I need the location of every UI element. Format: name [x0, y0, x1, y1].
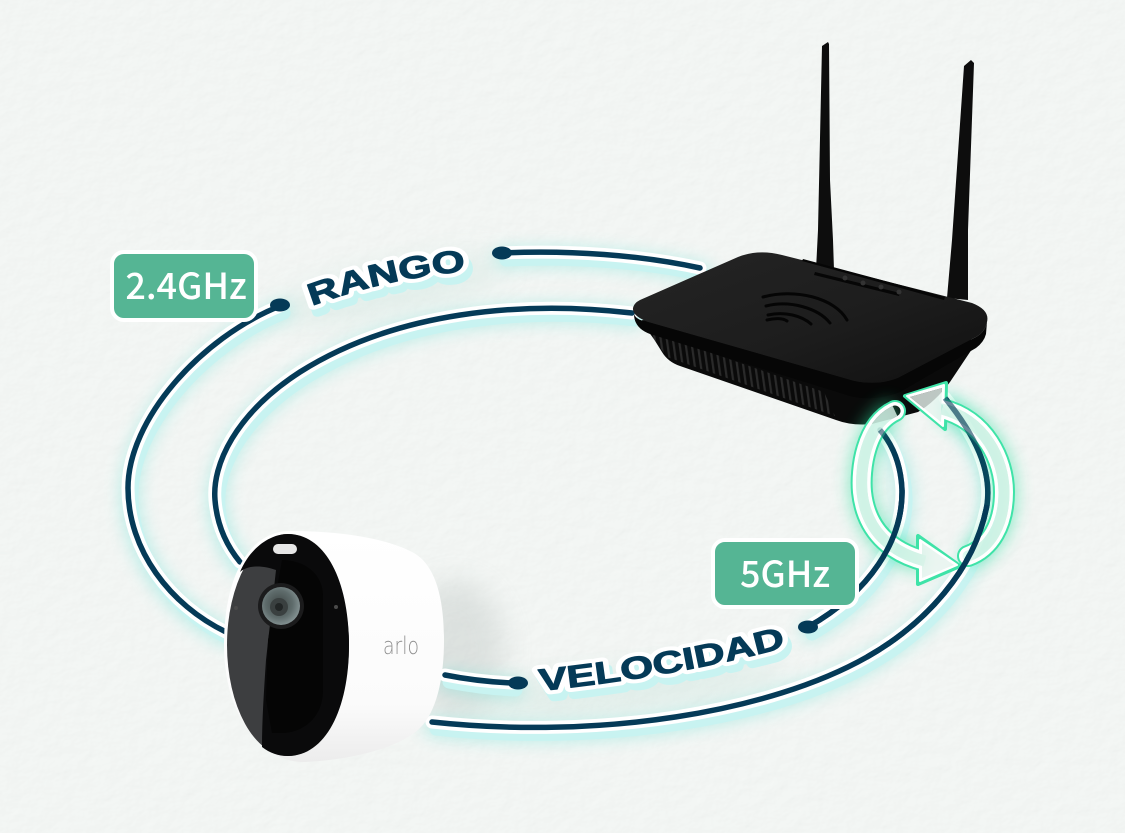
- ring outline: [862, 383, 1004, 584]
- wifi logo: [763, 294, 847, 324]
- camera body: [224, 531, 444, 762]
- inner signal line: 5GHz: [215, 308, 902, 683]
- pale ring interior: [862, 388, 1004, 578]
- router front edge: [634, 314, 987, 398]
- outer signal line: 2.4GHz: [128, 252, 988, 727]
- right antenna: [947, 60, 974, 300]
- router top face: [633, 252, 987, 383]
- badge: 5GHz: [713, 540, 857, 607]
- inner reflection panel: [266, 560, 323, 733]
- label: VELOCIDAD: VELOCIDAD: [537, 629, 782, 690]
- router lower body: [642, 320, 978, 424]
- badge: 2.4GHz: 2.4GHz: [125, 258, 247, 310]
- soft shadows on the wall: [267, 241, 791, 730]
- badge: 2.4GHz: [112, 252, 256, 320]
- camera lens: [258, 583, 304, 629]
- label: VELOCIDAD: VELOCIDAD: [536, 636, 792, 702]
- vents: [648, 331, 835, 416]
- sync icon: green cycle arrows: [862, 383, 1004, 584]
- label: RANGO: RANGO: [306, 250, 464, 306]
- label: RANGO: RANGO: [311, 258, 473, 317]
- camera black face: [227, 534, 349, 756]
- sensors: [234, 605, 338, 610]
- ring glow: [862, 409, 1004, 561]
- indicator light: [273, 544, 297, 554]
- left antenna: [816, 42, 834, 270]
- camera: [224, 531, 444, 762]
- line end dots: [270, 246, 818, 690]
- label: VELOCIDAD: VELOCIDAD: [532, 626, 788, 694]
- outer signal line glow: rango and bottom arc: [128, 252, 992, 734]
- dark inner panel: [240, 534, 349, 756]
- lines passing over the ring: [808, 398, 988, 657]
- badge: 5GHz: 5GHz: [740, 546, 830, 598]
- inner signal line glow: velocidad and top arc: [215, 308, 906, 690]
- label: RANGO: RANGO: [302, 246, 469, 310]
- camera logo: arlo: [383, 632, 419, 660]
- router: [633, 42, 987, 424]
- indicator strip: [802, 259, 945, 300]
